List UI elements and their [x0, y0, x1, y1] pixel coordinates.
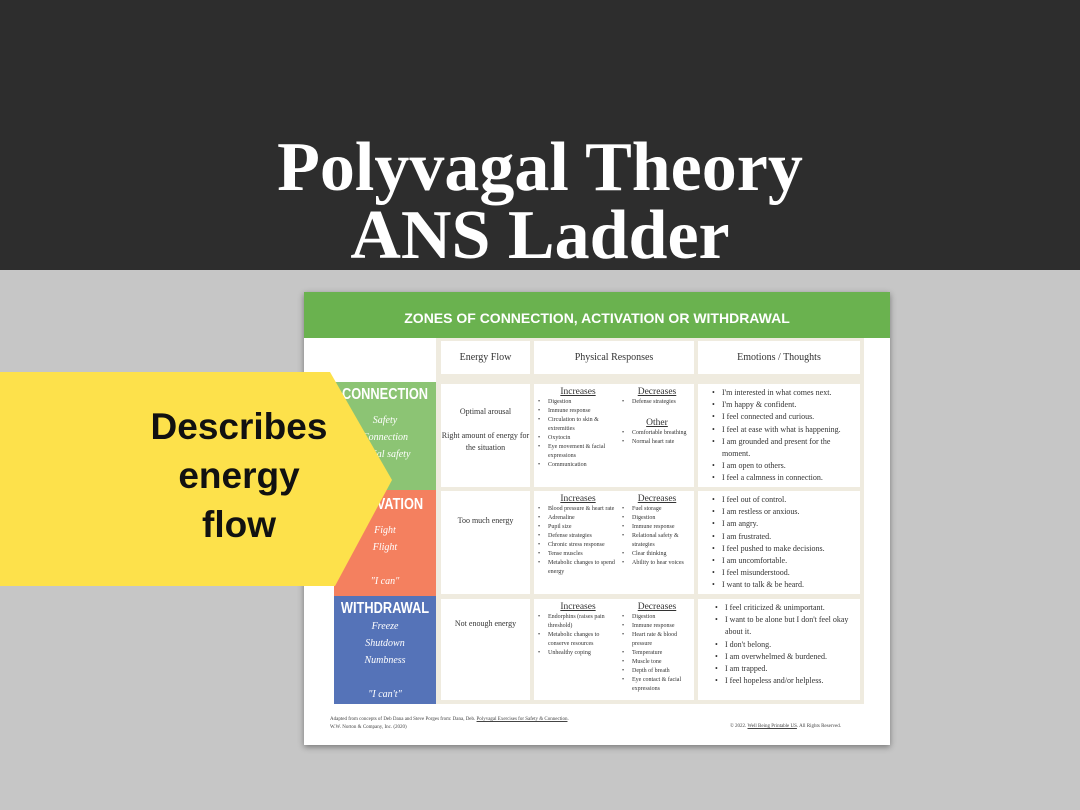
paper sheet: Decreases — [638, 387, 676, 397]
yellow arrow callout: Describes — [151, 406, 327, 447]
paper sheet: Adrenaline — [548, 515, 575, 521]
row connection: Right amount of energy for the situation — [442, 431, 529, 452]
paper sheet: I am restless or anxious. — [722, 507, 800, 516]
title — [277, 129, 803, 274]
row activation — [441, 491, 530, 594]
title: Polyvagal Theory — [277, 129, 803, 206]
zone: connection — [334, 382, 436, 490]
paper sheet: I'm happy & confident. — [722, 400, 796, 409]
zone: connection: Connection — [362, 432, 408, 443]
row connection: Optimal arousal — [460, 407, 511, 416]
zone: withdrawal: WITHDRAWAL — [341, 600, 429, 617]
paper sheet: Heart rate & blood pressure — [632, 632, 677, 647]
paper sheet: Digestion — [632, 515, 655, 521]
zone: withdrawal: Freeze — [372, 621, 398, 632]
paper sheet: I am frustrated. — [722, 532, 771, 541]
paper sheet: I am grounded and present for the moment. — [722, 437, 830, 458]
paper sheet: I feel pushed to make decisions. — [722, 544, 825, 553]
paper sheet: Comfortable breathing — [632, 430, 686, 436]
paper sheet: Emotions / Thoughts — [737, 352, 821, 363]
paper sheet: Eye movement & facial expressions — [548, 444, 605, 459]
paper sheet: Defense strategies — [632, 399, 676, 405]
paper sheet: I feel criticized & unimportant. — [725, 603, 825, 612]
zone: withdrawal: "I can't" — [368, 689, 402, 700]
paper sheet: Fuel storage — [632, 506, 662, 512]
paper sheet: Increases — [560, 494, 596, 504]
paper sheet: I want to talk & be heard. — [722, 580, 804, 589]
paper sheet: Immune response — [632, 623, 674, 629]
paper sheet: Decreases — [638, 602, 676, 612]
yellow arrow callout: flow — [202, 504, 276, 545]
row withdrawal — [441, 599, 530, 700]
zone: connection: CONNECTION — [342, 386, 428, 403]
yellow arrow callout — [0, 372, 392, 586]
paper sheet: I feel at ease with what is happening. — [722, 425, 841, 434]
dark title band — [0, 0, 1080, 270]
paper sheet: Metabolic changes to conserve resources — [548, 632, 599, 647]
footer credits — [330, 716, 569, 730]
paper sheet: I don't belong. — [725, 640, 771, 649]
title: ANS Ladder — [350, 197, 730, 274]
footer credits: Adapted from concepts of Deb Dana and Steve Porges from: Dana, Deb. Polyvagal Exercises for Safety & Connection. — [330, 717, 569, 722]
paper sheet: I am uncomfortable. — [722, 556, 787, 565]
paper sheet: Increases — [560, 387, 596, 397]
paper sheet: I feel hopeless and/or helpless. — [725, 676, 823, 685]
paper sheet: Digestion — [548, 399, 571, 405]
sheet header — [304, 292, 890, 338]
paper sheet: Digestion — [632, 614, 655, 620]
copyright: © 2022. Well Being Printable US. All Rights Reserved. — [730, 724, 841, 729]
paper sheet: I am trapped. — [725, 664, 767, 673]
paper sheet: I feel connected and curious. — [722, 412, 814, 421]
zone: activation: Flight — [373, 542, 397, 553]
paper sheet: Oxytocin — [548, 435, 570, 441]
paper sheet: Decreases — [638, 494, 676, 504]
paper sheet: Pupil size — [548, 524, 572, 530]
paper sheet: Temperature — [632, 650, 662, 656]
yellow arrow callout: energy — [178, 455, 300, 496]
sheet header: ZONES OF CONNECTION, ACTIVATION OR WITHDRAWAL — [404, 310, 790, 326]
paper sheet: Circulation to skin & extremities — [548, 417, 599, 432]
paper sheet: Increases — [560, 602, 596, 612]
zone: withdrawal — [334, 596, 436, 704]
zone: connection: Social safety — [360, 449, 410, 460]
zone: activation — [334, 490, 436, 596]
paper sheet: Eye contact & facial expressions — [632, 677, 681, 692]
paper sheet: Other — [646, 418, 668, 428]
zone: withdrawal: Shutdown — [365, 638, 405, 649]
paper sheet: Tense muscles — [548, 551, 583, 557]
zone: activation: Fight — [374, 525, 396, 536]
paper sheet: Metabolic changes to spend energy — [548, 560, 615, 575]
zone: activation: ACTIVATION — [347, 496, 423, 513]
table background — [436, 338, 864, 704]
paper sheet: Depth of breath — [632, 668, 670, 674]
row connection — [441, 384, 530, 487]
paper sheet: Blood pressure & heart rate — [548, 506, 614, 512]
column headers — [441, 341, 530, 374]
column headers: Energy Flow — [460, 352, 511, 363]
paper sheet: I want to be alone but I don't feel okay about it. — [725, 615, 848, 636]
row activation: Too much energy — [458, 516, 513, 525]
row withdrawal: Not enough energy — [455, 619, 516, 628]
paper sheet: Muscle tone — [632, 659, 662, 665]
paper sheet: I feel a calmness in connection. — [722, 473, 823, 482]
paper sheet: Normal heart rate — [632, 439, 674, 445]
paper sheet: Clear thinking — [632, 551, 666, 557]
paper sheet: Immune response — [548, 408, 590, 414]
paper sheet — [304, 292, 890, 745]
footer credits: W.W. Norton & Company, Inc. (2020) — [330, 725, 407, 730]
paper sheet: Endorphins (raises pain threshold) — [548, 614, 605, 629]
paper sheet: I feel misunderstood. — [722, 568, 790, 577]
paper sheet: Unhealthy coping — [548, 650, 591, 656]
zone: activation: "I can" — [371, 576, 399, 587]
zone: connection: Safety — [373, 415, 397, 426]
paper sheet: Communication — [548, 462, 587, 468]
paper sheet: I'm interested in what comes next. — [722, 388, 831, 397]
paper sheet: I feel out of control. — [722, 495, 786, 504]
paper sheet: I am overwhelmed & burdened. — [725, 652, 827, 661]
zone: withdrawal: Numbness — [364, 655, 406, 666]
paper sheet: Defense strategies — [548, 533, 592, 539]
paper sheet: Immune response — [632, 524, 674, 530]
paper sheet: Chronic stress response — [548, 542, 605, 548]
paper sheet: Physical Responses — [575, 352, 653, 363]
paper sheet: I am angry. — [722, 519, 758, 528]
paper sheet: Ability to hear voices — [632, 560, 684, 566]
paper sheet: Relational safety & strategies — [632, 533, 679, 548]
paper sheet: I am open to others. — [722, 461, 786, 470]
